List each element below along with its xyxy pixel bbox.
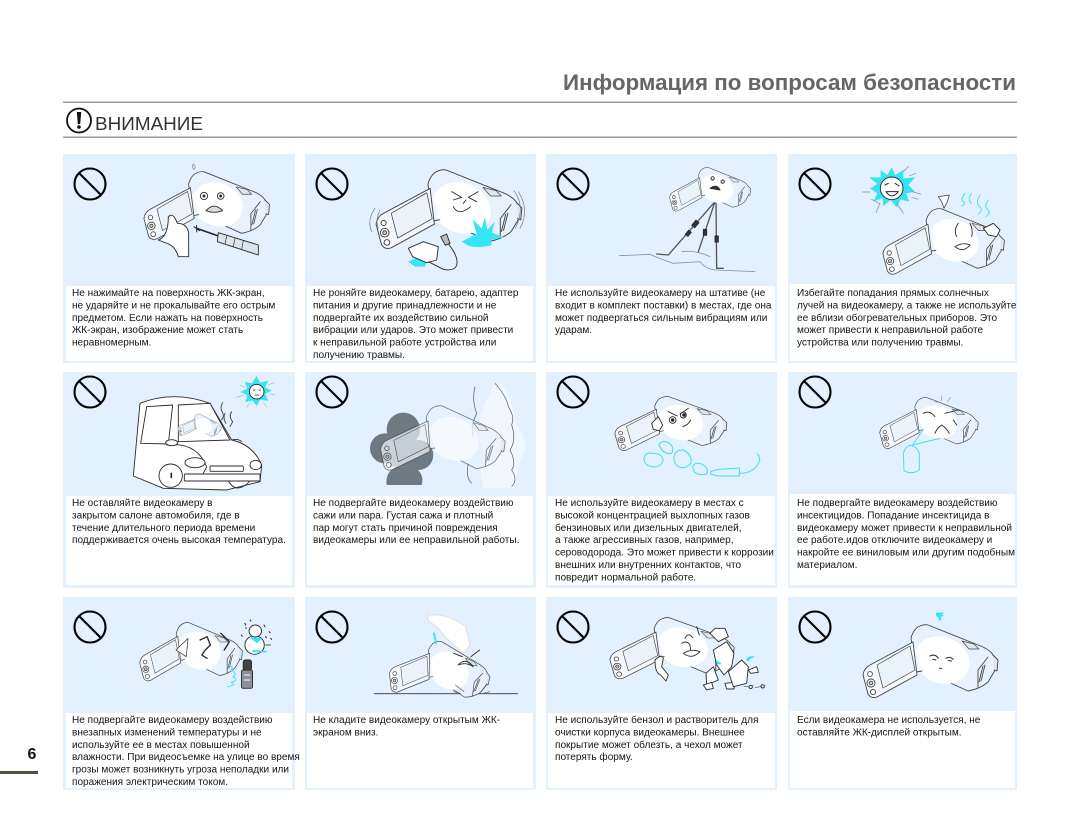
body text: может подвергаться сильным вибрациям или xyxy=(555,312,767,324)
body text: видеокамеры или ее неправильной работы. xyxy=(313,534,519,546)
body text: материалом. xyxy=(797,560,857,571)
body text: ее вблизи обогревательных приборов. Это xyxy=(797,312,998,324)
panel: LCD facing down xyxy=(305,597,536,790)
body text: внезапных изменений температуры и не xyxy=(72,727,262,738)
illustration: camera and spray xyxy=(880,396,978,473)
body text: покрытие может облезть, а чехол может xyxy=(555,739,743,751)
body text: Не используйте видеокамеру на штативе (не xyxy=(555,288,766,299)
body text: потерять форму. xyxy=(555,751,633,763)
body text: поражения электрическим током. xyxy=(72,777,228,788)
body text: Не используйте бензол и растворитель для xyxy=(555,714,758,726)
body text: а также агрессивных газов, например, xyxy=(555,535,734,546)
icon: prohibited xyxy=(800,168,830,200)
icon: prohibited xyxy=(316,168,348,200)
icon: prohibited xyxy=(558,376,588,408)
icon: prohibited xyxy=(74,612,106,642)
body text: Не подвергайте видеокамеру воздействию xyxy=(72,715,273,726)
body text: высокой концентрацией выхлопных газов xyxy=(555,510,750,521)
icon: prohibited xyxy=(74,376,106,408)
body text: Не используйте видеокамеру в местах с xyxy=(555,498,744,509)
icon: prohibited xyxy=(800,612,830,642)
body text: пар могут стать причиной повреждения xyxy=(313,523,498,534)
body text: Не оставляйте видеокамеру в xyxy=(72,498,213,509)
icon: prohibited xyxy=(800,376,830,408)
panel: soot and steam xyxy=(305,372,536,588)
body text: Не подвергайте видеокамеру воздействию xyxy=(797,498,998,509)
body text: неравномерным. xyxy=(72,338,151,349)
panel: insecticide xyxy=(788,372,1017,588)
body text: накройте ее виниловым или другим подобным xyxy=(797,547,1015,559)
illustration: camera on tripod xyxy=(619,167,755,272)
page number xyxy=(0,746,38,774)
body text: может привести к неправильной работе xyxy=(797,324,984,336)
body text: предметом. Если нажать на поверхность xyxy=(72,313,263,324)
body text: влажности. При видеосъемке на улице во время xyxy=(72,752,300,763)
body text: Избегайте попадания прямых солнечных xyxy=(797,287,989,299)
illustration: camera, snowman, bottle xyxy=(140,620,272,688)
illustration: camera under sun xyxy=(863,167,1004,274)
body text: устройства или получению травмы. xyxy=(797,338,963,349)
warning heading xyxy=(67,108,203,134)
illustration: dropped camera and adapter xyxy=(370,170,525,270)
body text: сероводорода. Это может привести к коррозии xyxy=(555,548,774,559)
body text: очистки корпуса видеокамеры. Внешнее xyxy=(555,727,745,738)
panel: solvents xyxy=(546,597,777,790)
body text: питания и другие принадлежности и не xyxy=(313,300,497,311)
body text: течение длительного периода времени xyxy=(72,523,255,534)
body text: ударам. xyxy=(555,325,592,336)
body text: грозы может возникнуть угроза неполадки или xyxy=(72,765,289,776)
panel: do not drop xyxy=(305,154,536,363)
body text: не ударяйте и не прокалывайте его острым xyxy=(72,300,275,311)
icon: prohibited xyxy=(316,612,348,642)
icon: exclamation xyxy=(67,108,91,132)
icon: prohibited xyxy=(558,612,588,642)
icon: prohibited xyxy=(74,168,106,200)
body text: закрытом салоне автомобиля, где в xyxy=(72,509,240,521)
body text: входит в комплект поставки) в местах, где она xyxy=(555,300,772,311)
body text: Не подвергайте видеокамеру воздействию xyxy=(313,498,514,509)
body text: сажи или пара. Густая сажа и плотный xyxy=(313,510,493,521)
body text: поддерживается очень высокая температура. xyxy=(72,535,286,546)
illustration: camera and exhaust xyxy=(615,396,760,476)
body text: используйте ее в местах повышенной xyxy=(72,740,250,751)
body text: вибрации или ударов. Это может привести xyxy=(313,324,513,336)
illustration: camera pressed to surface xyxy=(374,615,518,706)
illustration: camera with hand and screwdriver xyxy=(144,164,269,257)
panel: do not leave LCD open xyxy=(788,597,1017,790)
body text: оставляйте ЖК-дисплей открытым. xyxy=(797,727,962,738)
body text: Не роняйте видеокамеру, батарею, адаптер xyxy=(313,287,519,299)
body text: внешних или внутренних контактов, что xyxy=(555,560,742,571)
panel: do not press LCD xyxy=(63,154,295,363)
panel: temperature changes xyxy=(63,597,300,790)
body text: повредит нормальной работе. xyxy=(555,571,696,583)
body text: ЖК-экран, изображение может стать xyxy=(72,324,243,336)
icon: prohibited xyxy=(316,376,348,408)
panel: car xyxy=(63,372,295,588)
body text: инсектицидов. Попадание инсектицида в xyxy=(797,510,990,521)
body text: к неправильной работе устройства или xyxy=(313,337,496,349)
illustration: camera in soot and steam xyxy=(370,383,525,488)
illustration: camera and solvent bottles xyxy=(610,618,765,690)
title: Информация по вопросам безопасности xyxy=(563,70,1016,95)
body text: видеокамеру может привести к неправильной xyxy=(797,523,1012,534)
body text: получению травмы. xyxy=(313,350,405,361)
page number: 6 xyxy=(28,746,37,763)
warning heading: ВНИМАНИЕ xyxy=(95,113,203,134)
body text: Не кладите видеокамеру открытым ЖК- xyxy=(313,715,500,726)
body text: экраном вниз. xyxy=(313,727,378,738)
icon: prohibited xyxy=(558,168,588,200)
body text: лучей на видеокамеру, а также не используйте xyxy=(797,300,1017,311)
illustration: car with camera inside xyxy=(133,376,275,490)
illustration: idle camera xyxy=(863,613,998,698)
panel: tripod xyxy=(546,154,777,363)
panel: exhaust gases xyxy=(546,372,777,588)
body text: Если видеокамера не используется, не xyxy=(797,715,981,726)
body text: подвергайте их воздействию сильной xyxy=(313,313,489,324)
panel: direct sunlight xyxy=(788,154,1017,363)
body text: бензиновых или дизельных двигателей, xyxy=(555,522,742,534)
body text: Не нажимайте на поверхность ЖК-экран, xyxy=(72,288,265,299)
body text: ее работе.идов отключите видеокамеру и xyxy=(797,534,992,546)
